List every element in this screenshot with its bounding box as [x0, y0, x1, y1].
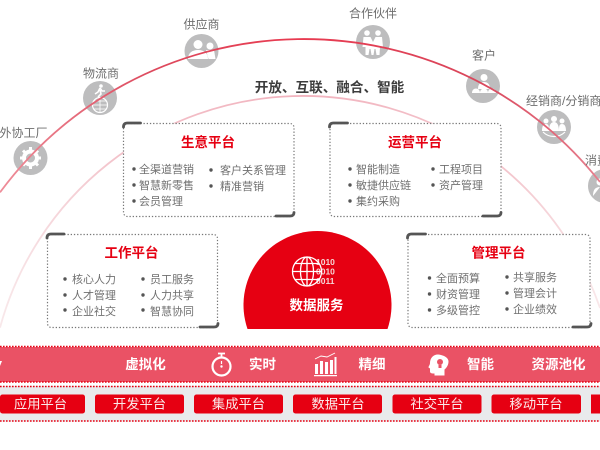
heading: management platform: 管理平台 [472, 244, 526, 260]
slogan heading: 开放、互联、融合、智能 [255, 79, 405, 95]
label: outsourcing factory: 外协工厂 [0, 125, 48, 140]
button: mobile platform: 移动平台 [509, 397, 563, 412]
label: suppliers: 供应商 [183, 16, 220, 32]
list: operations items: 集约采购 [356, 194, 400, 208]
icon: logistics runner on globe [83, 81, 117, 115]
list: management items: 财资管理 [436, 287, 480, 301]
label: resource pooling: 资源池化 [532, 356, 586, 372]
list: business items: 智慧新零售 [139, 178, 194, 192]
heading: operations platform: 运营平台 [388, 134, 442, 150]
icon: supplier people [184, 34, 218, 68]
label: virtualization: 虚拟化 [125, 356, 166, 372]
list: operations items: 资产管理 [439, 178, 483, 192]
list: work items: 企业社交 [72, 304, 116, 318]
list: business items: 客户关系管理 [220, 163, 286, 177]
heading: work platform: 工作平台 [104, 244, 158, 260]
panel: work platform [47, 234, 218, 328]
button: social platform [392, 394, 482, 414]
button: application platform [0, 394, 85, 414]
list: business items [132, 162, 286, 208]
icon: outsourcing factory gear [14, 141, 48, 175]
button: data platform: 数据平台 [311, 397, 365, 412]
button: data platform [293, 394, 382, 414]
list: management items: 多级管控 [436, 303, 480, 317]
button: mobile platform [492, 394, 581, 414]
icon: consumer [588, 170, 600, 202]
label: distributors: 经销商/分销商 [526, 93, 600, 108]
icon: head with lightbulb [428, 354, 448, 376]
list: management items: 企业绩效 [513, 302, 557, 316]
icon: stopwatch [212, 354, 230, 376]
label: customers: 客户 [472, 48, 496, 62]
icon: left edge fragment [0, 361, 2, 366]
button: integration platform: 集成平台 [212, 397, 265, 412]
list: management items: 全面预算 [436, 271, 480, 285]
list: work items: 智慧协同 [150, 304, 194, 318]
inner arc [0, 96, 600, 328]
list: work items [63, 272, 194, 318]
list: management items [428, 270, 557, 317]
list: business items: 精准营销 [220, 179, 264, 193]
band: platform tools [0, 386, 600, 422]
button: development platform: 开发平台 [113, 397, 166, 412]
list: operations items: 智能制造 [356, 162, 400, 176]
icon: globe [292, 257, 322, 286]
list: management items: 管理会计 [513, 286, 557, 300]
list: operations items: 工程项目 [439, 163, 483, 176]
list: operations items [348, 162, 483, 208]
icon: customer group [466, 69, 500, 103]
panel: business platform [124, 123, 294, 216]
heading: business platform: 生意平台 [181, 134, 235, 150]
icon: partners holding hands [356, 25, 390, 59]
binary digits [316, 257, 335, 286]
list: operations items: 敏捷供应链 [356, 178, 411, 192]
icon: distributor team over globe [537, 110, 571, 144]
button: integration platform [194, 394, 283, 414]
list: business items: 会员管理 [139, 194, 183, 208]
list: business items: 全渠道营销 [139, 162, 194, 176]
label: intelligent: 智能 [467, 356, 494, 372]
panel: management platform [408, 234, 591, 328]
button: clipped right edge [591, 394, 600, 414]
button: application platform: 应用平台 [14, 397, 67, 412]
binary digits: 1010 [316, 257, 335, 267]
panel: data services dome [243, 231, 391, 329]
list: work items: 员工服务 [150, 273, 194, 286]
list: work items: 人力共享 [150, 288, 194, 302]
label: partners: 合作伙伴 [349, 6, 397, 20]
label: refined: 精细 [358, 356, 386, 372]
label: data services: 数据服务 [290, 297, 344, 313]
list: management items: 共享服务 [513, 270, 557, 284]
list: work items: 核心人力 [72, 272, 116, 286]
outer arc [0, 39, 600, 192]
label: logistics: 物流商 [83, 66, 119, 80]
button: development platform [95, 394, 184, 414]
button: social platform: 社交平台 [410, 396, 464, 412]
binary digits: 0011 [316, 276, 335, 286]
binary digits: 0010 [316, 266, 335, 276]
label: real time: 实时 [249, 356, 276, 372]
list: work items: 人才管理 [72, 288, 116, 302]
band: capabilities [0, 346, 600, 382]
icon: bar chart [314, 353, 337, 376]
panel: operations platform [330, 123, 501, 216]
